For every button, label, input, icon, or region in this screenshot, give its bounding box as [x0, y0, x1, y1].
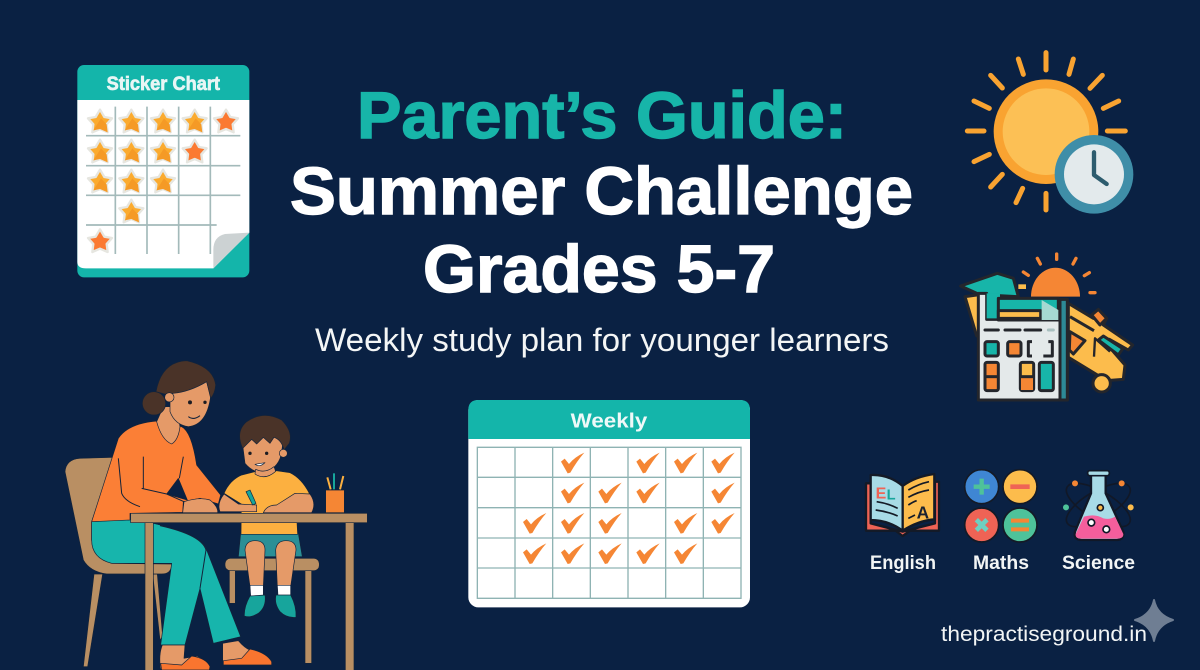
- table: [131, 513, 367, 670]
- yellow vehicle: [1068, 303, 1133, 381]
- child shorts: [238, 533, 302, 557]
- woman hand: [183, 499, 218, 513]
- small sun: [1031, 268, 1080, 297]
- icon: science flask: [1060, 471, 1137, 540]
- woman arm seams: [118, 457, 184, 507]
- child arms: [219, 494, 257, 512]
- label: Maths: Maths: [973, 553, 1029, 574]
- weekly header: [468, 400, 750, 439]
- calendar grid: [477, 447, 741, 598]
- woman bun: [142, 392, 166, 415]
- woman feet: [160, 641, 272, 670]
- yellow page: [965, 293, 990, 337]
- child shoes: [244, 595, 265, 617]
- child chair: [225, 558, 319, 663]
- icon: book: [866, 474, 939, 536]
- woman torso and arm: [92, 421, 221, 522]
- calculator display lines: [985, 325, 1041, 334]
- icon: book: A: [917, 502, 930, 522]
- title: Parent’s Guide:: [357, 78, 847, 152]
- icon: maths symbols: [965, 470, 1037, 542]
- pencil: [246, 490, 256, 505]
- child head: [243, 430, 283, 473]
- title: Summer Challenge: [290, 154, 913, 229]
- child legs: [245, 541, 265, 587]
- woman chair: [65, 457, 172, 667]
- woman eyes and smile: [188, 400, 207, 404]
- sticker chart paper: [77, 100, 249, 268]
- panel: sticker chart: [77, 65, 249, 277]
- calculator body: [978, 293, 1067, 400]
- icon: sparkle: [1135, 600, 1173, 641]
- sun rays small: [1023, 254, 1095, 293]
- icon: book: E: [876, 485, 887, 502]
- woman hair: [156, 361, 216, 398]
- child face: [248, 452, 268, 455]
- woman face: [170, 382, 211, 427]
- page curl: [213, 233, 249, 268]
- child shirt: [224, 471, 309, 534]
- child hair: [240, 415, 290, 450]
- sun disc: [994, 79, 1098, 184]
- website credit: thepractiseground.in: [941, 623, 1147, 646]
- panel: subjects: [866, 470, 1137, 542]
- subtitle: Weekly study plan for younger learners: [315, 322, 889, 358]
- title: [290, 78, 913, 307]
- stars: [88, 110, 238, 252]
- title: Grades 5-7: [423, 232, 775, 307]
- heading: sticker chart: Sticker Chart: [107, 74, 221, 95]
- icon: book: L: [887, 487, 896, 503]
- icon: sun and clock: [967, 53, 1133, 214]
- icon: calculator with summer items: [961, 254, 1133, 400]
- heading: weekly: Weekly: [571, 411, 647, 433]
- child socks: [250, 585, 263, 596]
- weekly card: [468, 400, 750, 607]
- label: English: English: [870, 553, 936, 574]
- pencil cup: [326, 473, 344, 513]
- sticker grid: [86, 107, 240, 254]
- clock: [1055, 135, 1133, 214]
- child: [219, 415, 314, 617]
- woman neck: [157, 407, 180, 444]
- label: Science: Science: [1062, 553, 1135, 574]
- check marks: [523, 453, 735, 564]
- woman legs: [92, 519, 241, 645]
- calculator keys: [985, 342, 1053, 391]
- teal folder: [961, 273, 1018, 297]
- panel: weekly calendar: [468, 400, 750, 607]
- sticker chart card: [77, 65, 249, 277]
- sun rays: [967, 53, 1125, 210]
- illustration: mother and child at desk: [65, 361, 367, 670]
